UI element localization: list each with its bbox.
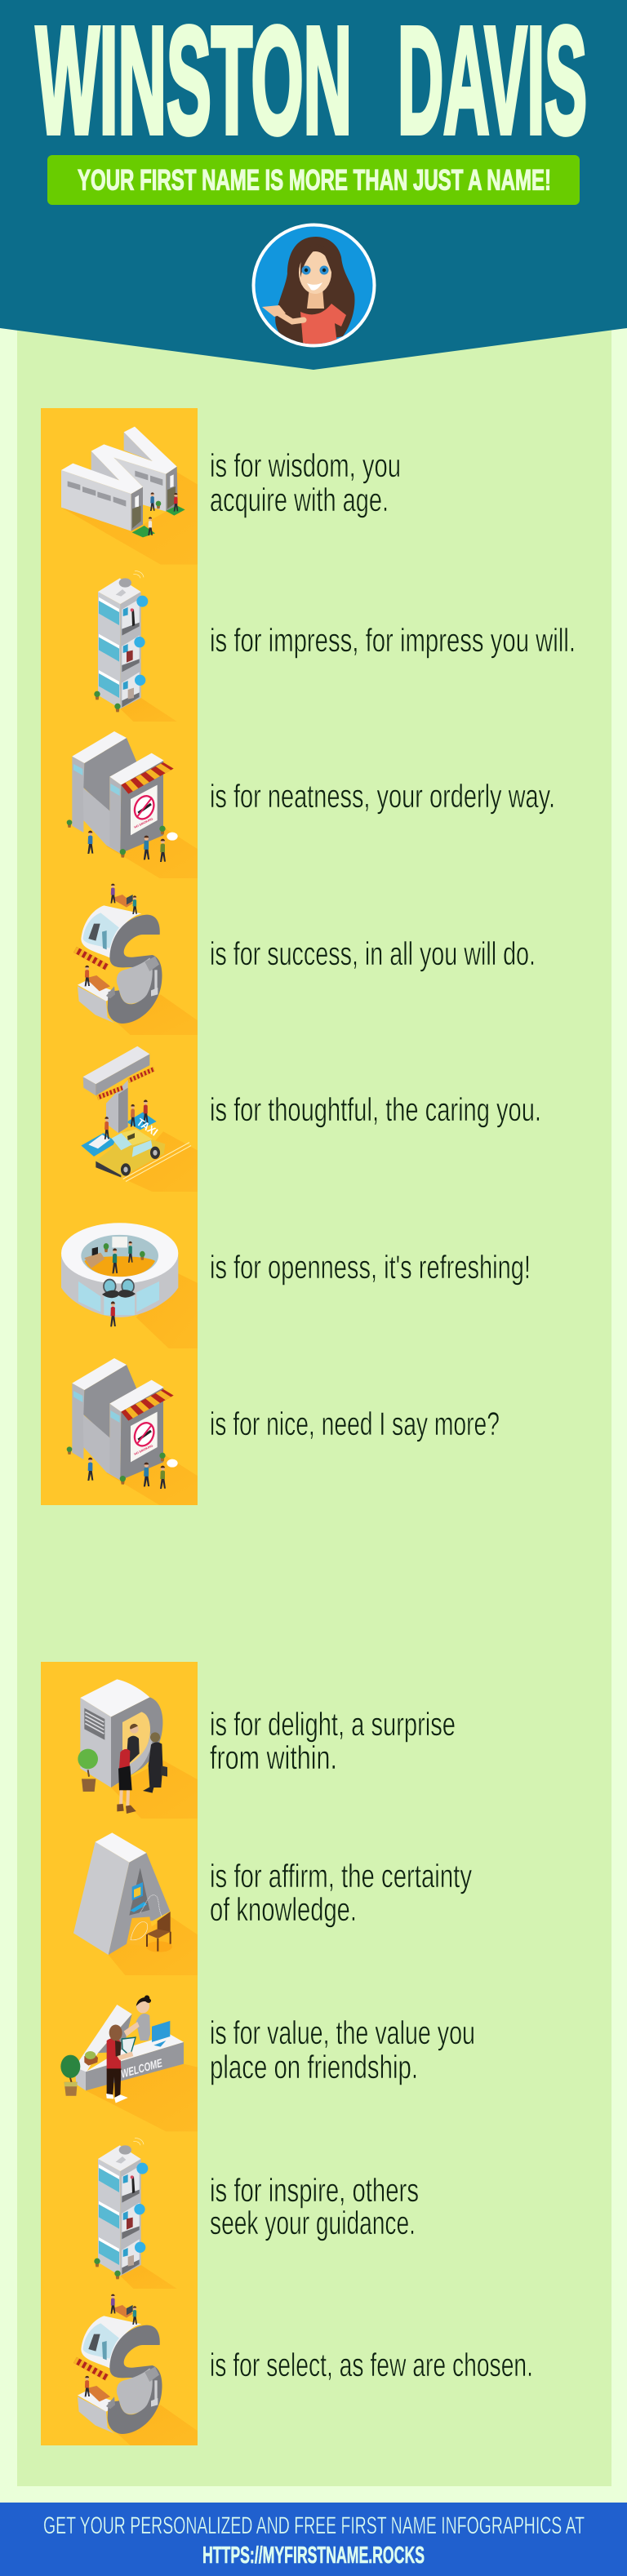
text: N second: is for nice, need I say more? bbox=[210, 1406, 500, 1442]
tagline banner bbox=[47, 155, 580, 205]
illustration column: letter I bbox=[41, 565, 198, 722]
text: D: is for delight, a surprise bbox=[210, 1707, 456, 1743]
text: V: is for value, the value you bbox=[210, 2015, 475, 2051]
text: A: of knowledge. bbox=[210, 1892, 357, 1928]
text: V: place on friendship. bbox=[210, 2050, 418, 2085]
text: I second bbox=[210, 2173, 419, 2241]
footer: HTTPS://MYFIRSTNAME.ROCKS bbox=[202, 2543, 425, 2569]
illustration column: letter T with taxi: TAXI bbox=[134, 1116, 160, 1139]
text: D: from within. bbox=[210, 1740, 337, 1776]
illustration column: letter W bbox=[41, 408, 198, 565]
header band bbox=[0, 0, 627, 370]
illustration column: letter N repeated bbox=[41, 1348, 198, 1506]
illustration column: letter T with taxi bbox=[41, 1035, 198, 1192]
avatar bbox=[251, 224, 376, 351]
text: I second: seek your guidance. bbox=[210, 2205, 416, 2241]
text: I second: is for inspire, others bbox=[210, 2173, 419, 2209]
illustration column: letter A bbox=[41, 1819, 198, 1975]
illustration column: letter I repeated bbox=[41, 2132, 198, 2289]
illustration column: letter V with reception desk: WELCOME bbox=[120, 2056, 164, 2081]
illustration column: letter S repeated bbox=[41, 2289, 198, 2445]
text: V bbox=[210, 2015, 475, 2085]
text: W bbox=[210, 448, 401, 518]
footer bbox=[0, 2503, 627, 2576]
text: W: acquire with age. bbox=[210, 482, 389, 518]
illustration column: letter S bbox=[41, 878, 198, 1035]
text: A: is for affirm, the certainty bbox=[210, 1859, 472, 1894]
text: D bbox=[210, 1707, 456, 1776]
illustration column: letter N bbox=[41, 722, 198, 879]
text: W: is for wisdom, you bbox=[210, 448, 401, 484]
illustration column: letter D bbox=[41, 1662, 198, 1819]
illustration column: letter O bbox=[41, 1192, 198, 1348]
text: A bbox=[210, 1859, 472, 1928]
illustration column: letter V with reception desk bbox=[41, 1975, 198, 2132]
